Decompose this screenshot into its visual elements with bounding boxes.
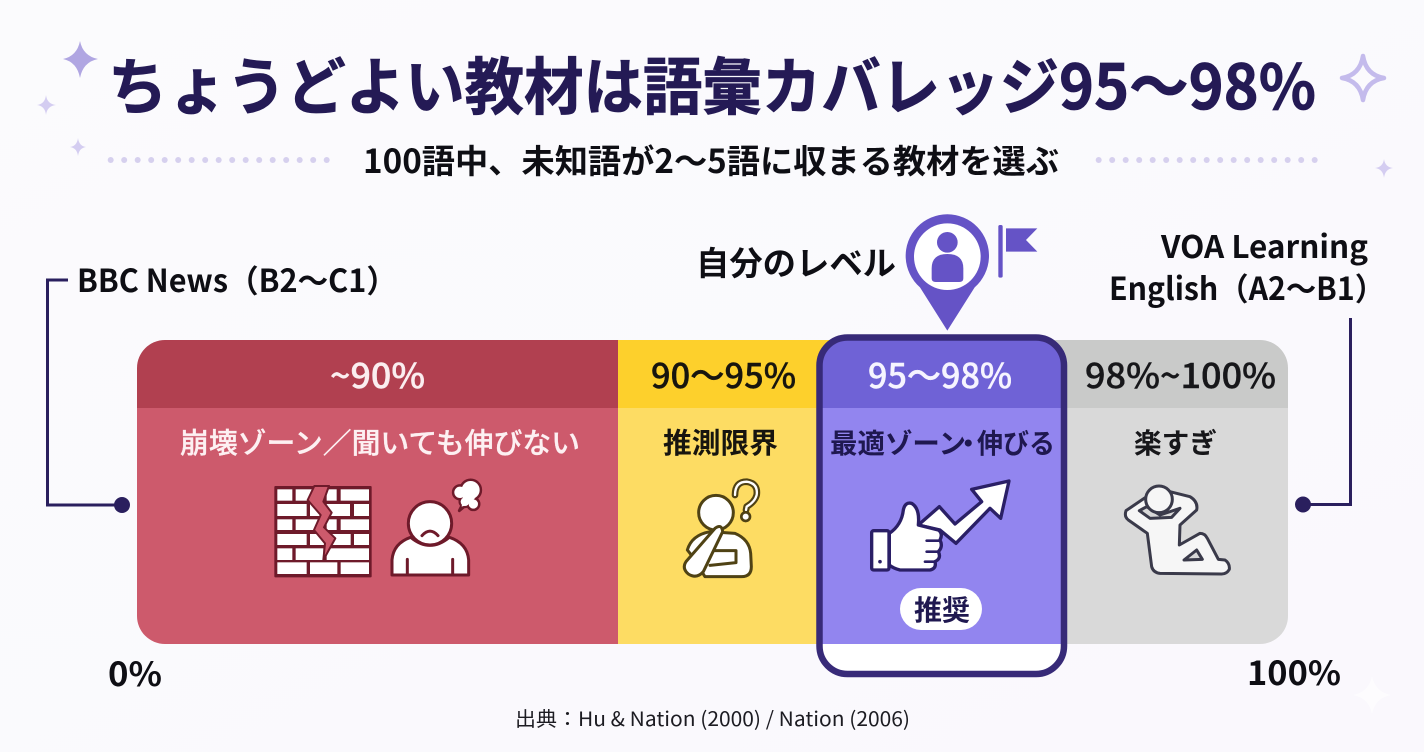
zone name: collapse: 崩壊ゾーン／聞いても伸びない [180, 421, 580, 462]
zone name: optimal: 伸びる [977, 421, 1055, 461]
zone name: too easy: 楽すぎ [1134, 422, 1217, 462]
callout: VOA Learning English [1109, 222, 1385, 512]
axis label: 0%: 0% [108, 648, 162, 696]
icon: cracked brick wall [274, 486, 372, 577]
callout: BBC News [48, 256, 397, 513]
label: 98%~100%: 98%~100% [1085, 349, 1276, 398]
icon: location pin with person and flag [906, 214, 1037, 331]
label: ~90%: ~90% [330, 349, 425, 398]
panel: purple zone [822, 340, 1061, 644]
axis label: 100%: 100% [1247, 647, 1341, 695]
highlight frame [820, 338, 1064, 674]
panel: yellow zone [618, 340, 850, 644]
title: ちょうどよい教材は語彙カバレッジ95〜98% [108, 37, 1316, 127]
label: 90〜95%: 90〜95% [651, 349, 796, 398]
dotted rule left [108, 157, 330, 163]
icon: dejected person with puff [392, 480, 481, 575]
icon: thumbs up with rising arrow [872, 481, 1009, 570]
zone name: optimal: 最適ゾーン [830, 421, 966, 461]
icon: relaxed person [1125, 486, 1229, 574]
label: 95〜98%: 95〜98% [868, 349, 1012, 398]
callout: BBC News: BBC News（B2〜C1） [77, 256, 397, 302]
subtitle: 100語中、未知語が2〜5語に収まる教材を選ぶ [363, 135, 1059, 183]
source note: 出典：Hu & Nation (2000) / Nation (2006) [515, 703, 910, 732]
callout: VOA Learning English: VOA Learning [1160, 222, 1368, 267]
panel: grey zone [1034, 340, 1288, 644]
my level label: 自分のレベル [696, 237, 896, 285]
callout: VOA Learning English: English（A2〜B1） [1109, 264, 1385, 310]
zone name: guess limit: 推測限界 [663, 421, 778, 462]
dotted rule right [1096, 157, 1318, 163]
recommended badge: 推奨 [914, 589, 970, 629]
icon: thinking person with question mark [684, 482, 757, 577]
recommended badge [900, 588, 982, 630]
zone name: optimal: ・ [954, 421, 982, 461]
stacked bar: vocabulary coverage zones [137, 340, 1288, 644]
panel: red zone [137, 340, 618, 644]
